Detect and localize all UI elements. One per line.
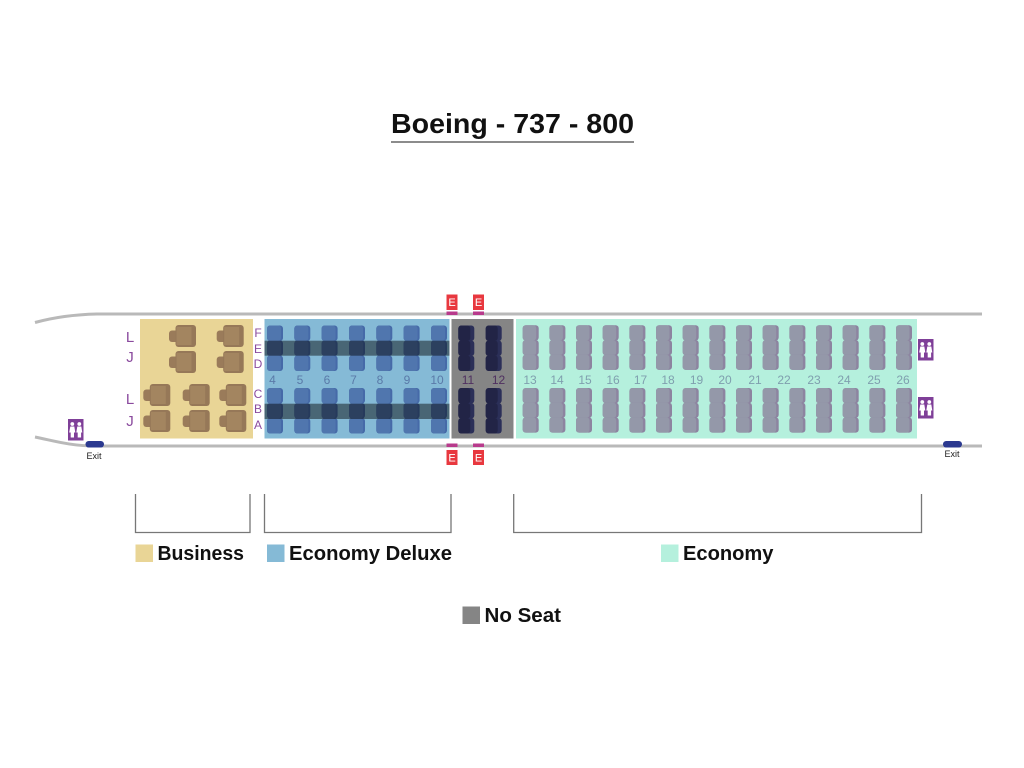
legend: no seat: No Seat [484,605,561,627]
deluxe row numbers: 5 [297,373,304,387]
economy row numbers: 21 [748,373,762,387]
legend: economy deluxe: Economy Deluxe [289,543,452,565]
economy row numbers: 19 [690,373,703,387]
icon: rear lavatory lower [918,397,934,418]
deluxe row numbers: 7 [350,373,357,387]
emergency exits top: E [448,297,456,309]
economy deluxe column letters: E [254,342,262,356]
deluxe row numbers: 8 [377,373,384,387]
economy row numbers: 23 [807,373,821,387]
legend: economy: Economy [683,543,774,565]
deluxe row numbers: 9 [404,373,411,387]
deluxe row numbers [269,373,444,387]
economy row numbers: 18 [661,373,675,387]
business seats [143,325,246,432]
economy seats [523,325,912,433]
economy deluxe column letters: B [254,402,262,416]
emergency exits bottom [446,444,484,465]
economy row numbers: 20 [718,373,732,387]
blocked row numbers: 12 [492,373,505,387]
title: Boeing - 737 - 800 [391,108,634,139]
economy row numbers: 16 [606,373,620,387]
deluxe row numbers: 4 [269,373,276,387]
economy deluxe column letters: D [254,357,263,371]
economy row numbers: 17 [634,373,647,387]
panel: business cabin [140,319,253,438]
economy row numbers: 25 [867,373,881,387]
front exit [86,441,104,461]
icon: front lavatory [68,419,84,440]
economy deluxe column letters: C [254,387,263,401]
icon: rear lavatory upper [918,339,934,360]
panel: no seat rows [452,319,514,438]
bracket: business [136,494,250,532]
bracket: economy [514,494,922,532]
panel: economy deluxe cabin [264,319,450,438]
economy deluxe column letters [254,326,263,432]
economy row numbers: 22 [777,373,791,387]
deluxe seats [267,326,447,434]
restricted middle seat bands [264,341,450,419]
business column letters [126,329,134,430]
front exit: Exit [86,451,102,461]
business column letters: L [126,329,134,346]
emergency exits top [446,294,484,315]
emergency exits bottom: E [475,452,482,464]
economy row numbers: 13 [523,373,537,387]
rear exit: Exit [944,449,960,459]
economy row numbers [523,373,910,387]
economy deluxe column letters: F [254,326,262,340]
emergency exits top: E [475,297,482,309]
business column letters: J [126,413,134,430]
legend: business: Business [158,543,244,565]
blocked row numbers [462,373,505,387]
economy row numbers: 15 [578,373,592,387]
blocked row numbers: 11 [462,373,475,387]
emergency exits bottom: E [448,452,456,464]
deluxe row numbers: 6 [324,373,331,387]
bracket: economy deluxe [264,494,451,532]
blocked seats [458,326,502,434]
rear exit [943,441,962,459]
fuselage outline [35,314,982,446]
economy row numbers: 26 [896,373,910,387]
business column letters: L [126,391,134,408]
economy row numbers: 14 [550,373,564,387]
economy deluxe column letters: A [254,418,262,432]
economy row numbers: 24 [837,373,851,387]
panel: economy cabin [516,319,917,438]
deluxe row numbers: 10 [430,373,444,387]
business column letters: J [126,349,134,366]
